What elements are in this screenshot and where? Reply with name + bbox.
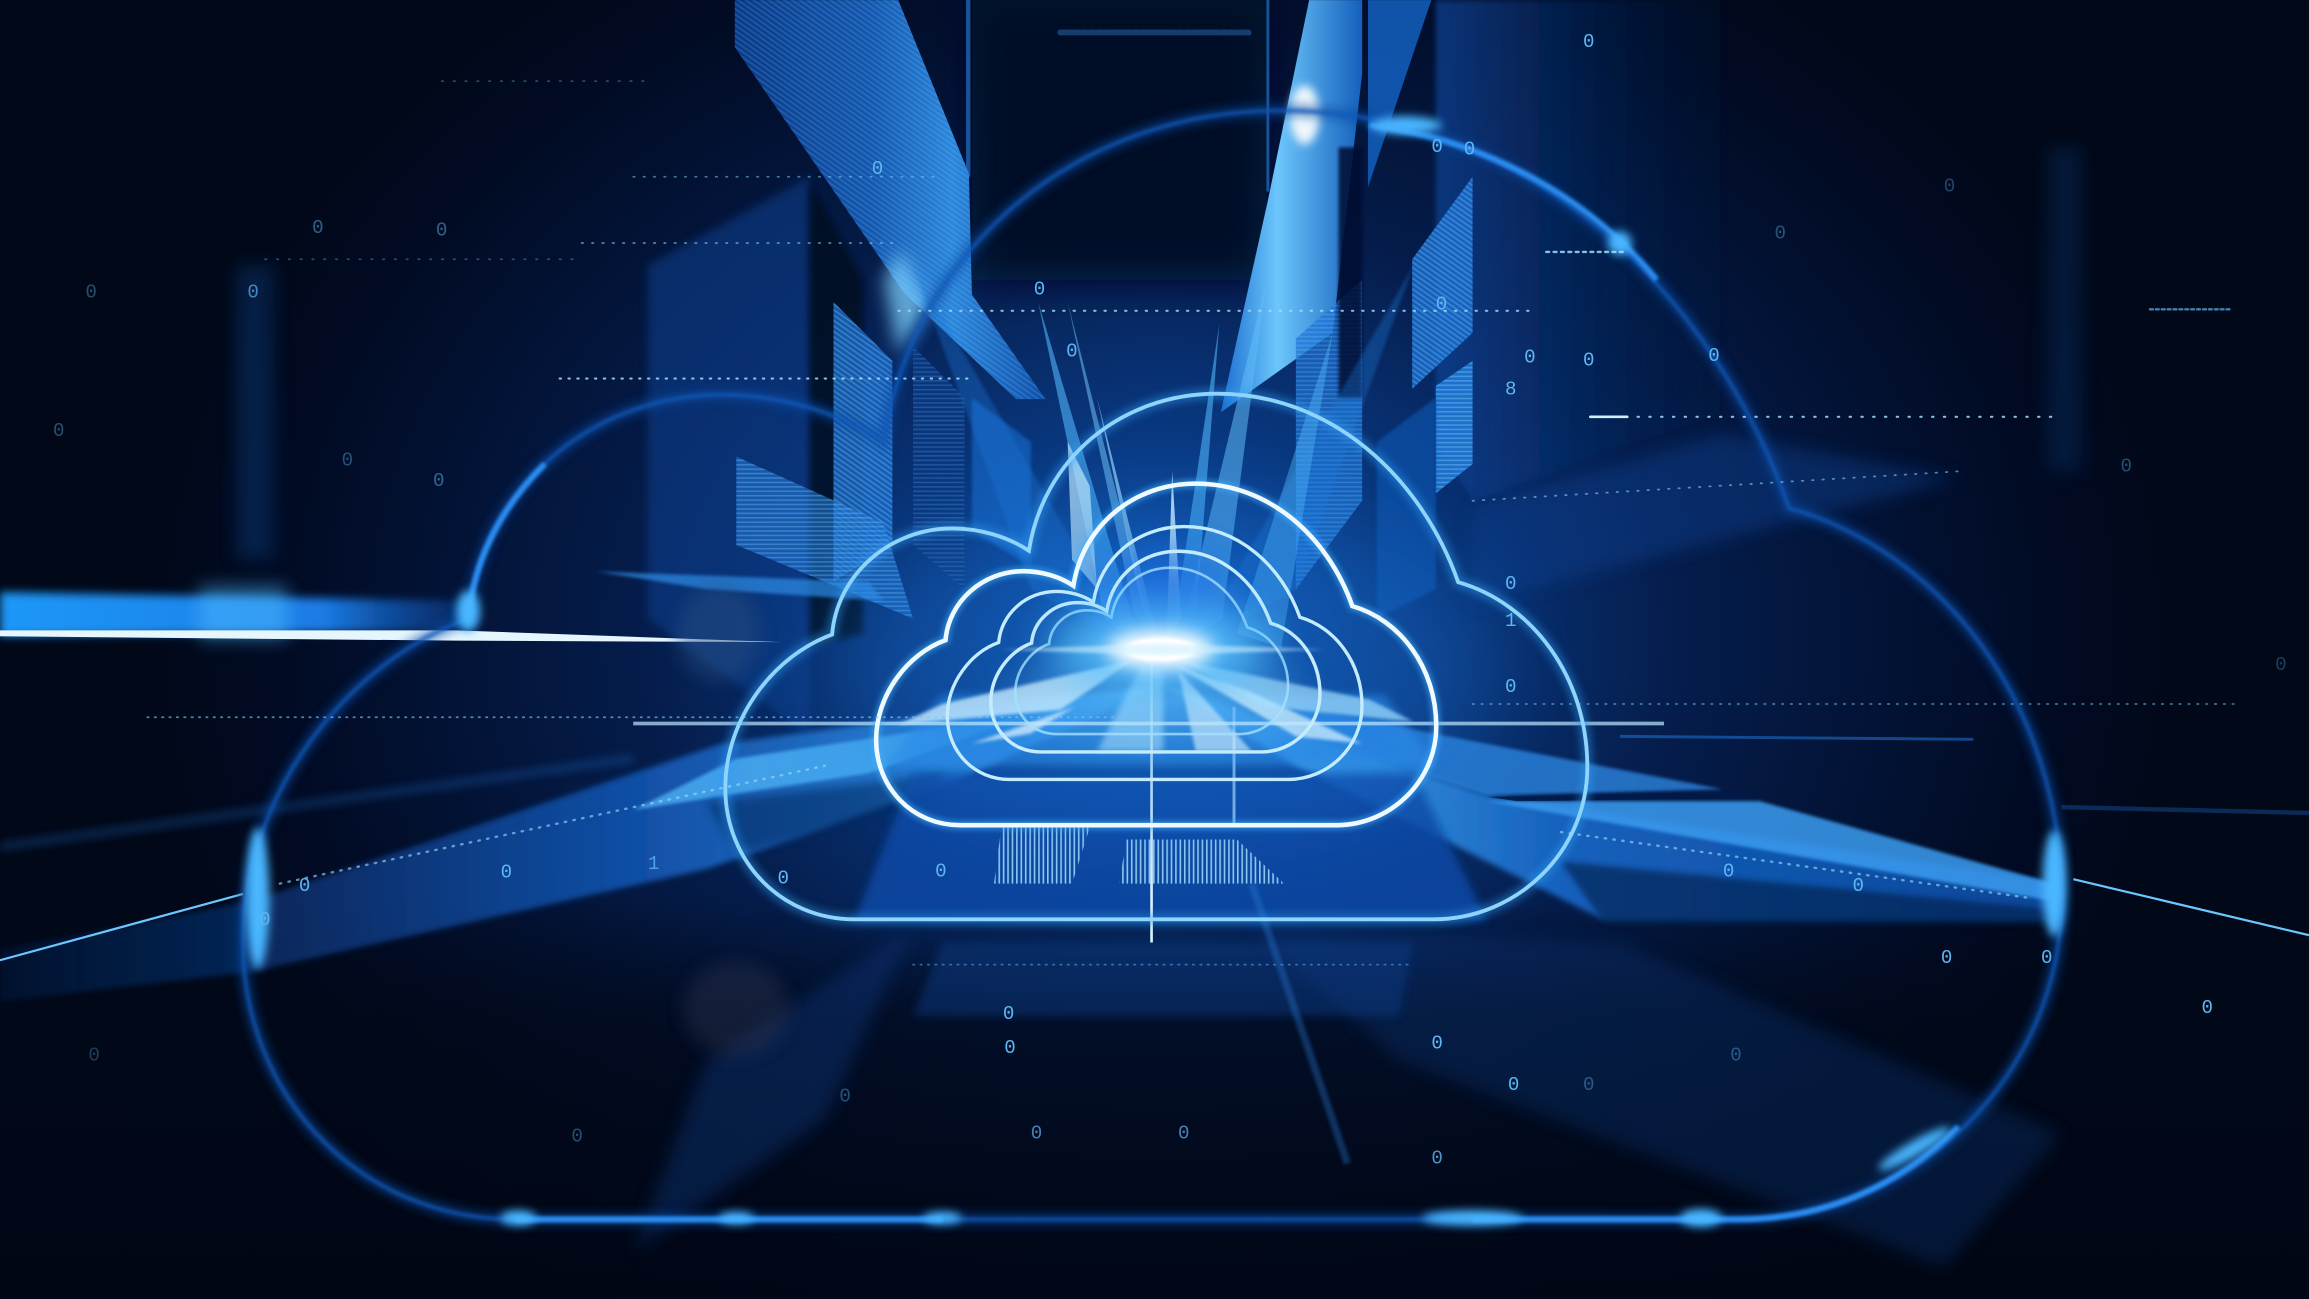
floor light beams <box>0 685 2062 1267</box>
binary digits: 0 <box>85 282 97 304</box>
floor light fragments <box>633 660 1664 751</box>
binary digits: 0 <box>2041 947 2052 969</box>
binary digits: 0 <box>935 860 947 882</box>
binary digits: 1 <box>1505 610 1516 632</box>
diagonal side light lines <box>0 648 2309 1163</box>
binary digits: 0 <box>312 217 324 239</box>
cloud outline: fourth <box>947 527 1362 779</box>
binary digits: 0 <box>88 1044 100 1066</box>
binary digits: 0 <box>1436 293 1447 315</box>
binary digits: 0 <box>839 1086 851 1108</box>
binary digits: 0 <box>2121 455 2132 477</box>
binary digits: 0 <box>53 420 64 442</box>
binary digits: 0 <box>1583 1074 1595 1096</box>
binary digits: 0 <box>1431 1147 1443 1169</box>
binary digits: 0 <box>1034 279 1045 301</box>
binary digits: 0 <box>1505 676 1516 698</box>
left towers <box>648 0 1046 736</box>
central light flare <box>1001 607 1325 689</box>
dotted data lines <box>147 32 2238 965</box>
binary digits: 0 <box>1508 1074 1519 1096</box>
binary digits: 0 <box>2275 654 2287 676</box>
left horizontal light streak <box>0 571 884 1056</box>
binary digits: 0 <box>872 158 883 180</box>
binary digits: 0 <box>299 875 310 897</box>
binary digits: 0 <box>1178 1122 1190 1144</box>
binary digits: 0 <box>1431 136 1443 158</box>
central glow behind clouds <box>825 508 1502 832</box>
cloud outline: sixth <box>1015 568 1288 734</box>
binary digits: 0 <box>1723 860 1734 882</box>
binary digits: 0 <box>1505 573 1516 595</box>
cloud outline: third <box>876 484 1436 825</box>
binary digits: 0 <box>1730 1044 1742 1066</box>
outer cloud light spots <box>246 116 2066 1227</box>
cloud outline: fifth <box>991 551 1320 752</box>
binary digits: 0 <box>778 868 789 890</box>
binary digits: 0 <box>1583 31 1595 53</box>
binary digits: 0 <box>501 862 512 884</box>
binary digits: 8 <box>1505 379 1516 401</box>
binary digits: 0 <box>1066 340 1078 362</box>
upward light spikes <box>913 265 1414 648</box>
binary digits: 0 <box>433 470 444 492</box>
binary digits: 0 <box>1774 223 1786 245</box>
binary digits: 0 <box>1031 1122 1042 1144</box>
binary digits: 1 <box>648 853 659 875</box>
cloud outline: outermost <box>243 111 2062 1219</box>
cloud outline: second <box>725 394 1587 919</box>
binary digits: 0 <box>1431 1033 1443 1055</box>
binary digits: 0 <box>1524 346 1536 368</box>
binary digits: 0 <box>1944 176 1955 198</box>
binary digits: 0 <box>259 909 271 931</box>
right towers <box>1221 0 1959 619</box>
binary digits: 0 <box>1003 1003 1014 1025</box>
binary digits: 0 <box>1853 875 1864 897</box>
binary digits: 0 <box>436 220 447 242</box>
binary digits: 0 <box>1583 349 1595 371</box>
binary digits: 0 <box>2202 997 2213 1019</box>
binary digits: 0 <box>1004 1037 1016 1059</box>
binary digits: 0 <box>1464 139 1475 161</box>
binary digits: 0 <box>571 1125 583 1147</box>
binary digits: 0 <box>342 449 353 471</box>
binary digits: 0 <box>247 282 259 304</box>
binary digits: 0 <box>1708 345 1720 367</box>
binary digits: 0 <box>1941 947 1952 969</box>
